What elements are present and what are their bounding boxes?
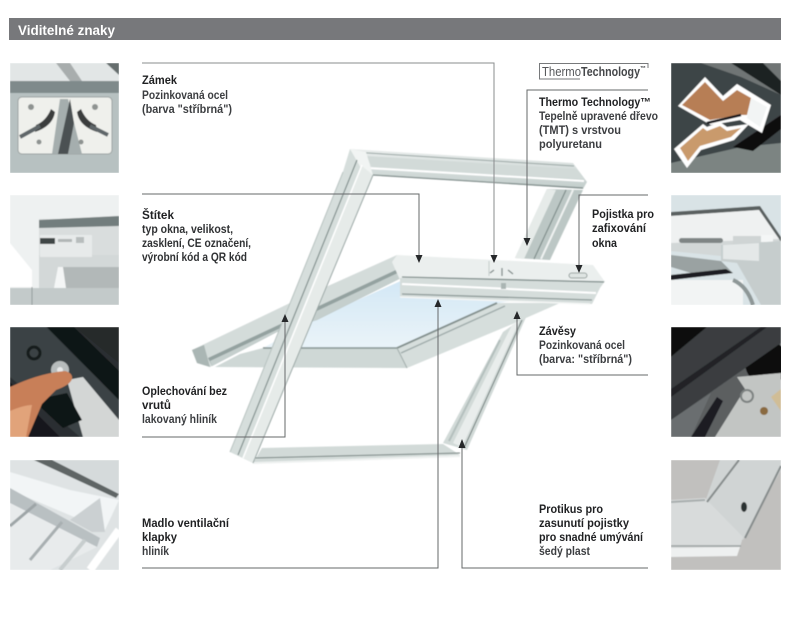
label: Protikus: pro snadné umývání <box>539 532 644 544</box>
label: Protikus <box>539 504 644 558</box>
leader: Madlo <box>142 299 442 568</box>
label: Madlo: hliník <box>142 546 170 558</box>
logo: ThermoTechnology: ™ <box>640 65 646 72</box>
label: Thermo Technology: polyuretanu <box>539 139 602 151</box>
label: Štítek <box>142 209 251 264</box>
label: Závěsy: Pozinkovaná ocel <box>539 340 625 352</box>
label: Protikus: šedý plast <box>539 546 590 558</box>
logo: ThermoTechnology: Technology <box>581 65 640 79</box>
label: Pojistka: Pojistka pro <box>592 209 654 221</box>
photo: locking pin <box>671 195 781 305</box>
frame left stile <box>230 149 373 463</box>
photo: hinge <box>671 327 781 437</box>
label: Madlo: Madlo ventilační <box>142 518 230 530</box>
label: Oplechování: vrutů <box>142 400 171 412</box>
label: Zámek: Pozinkovaná ocel <box>142 90 228 102</box>
photo: lock <box>10 63 119 173</box>
photo: vent handle <box>10 460 119 570</box>
heading: Viditelné znaky <box>18 23 115 38</box>
label: Štítek: zasklení, CE označení, <box>142 238 251 250</box>
label: Pojistka <box>592 209 654 250</box>
label: Protikus: zasunutí pojistky <box>539 518 630 530</box>
frame bottom rail <box>253 444 460 463</box>
lower right frame stile <box>443 315 527 450</box>
label: Závěsy: (barva: "stříbrná") <box>539 354 632 366</box>
window illustration <box>192 149 605 463</box>
label: Zámek: (barva "stříbrná") <box>142 104 232 116</box>
upper right stile behind sash <box>515 189 583 260</box>
sash right rail <box>397 303 560 368</box>
label: Thermo Technology: Thermo Technology™ <box>539 97 651 109</box>
leader: Oplechování <box>142 314 288 437</box>
label: Madlo <box>142 518 230 558</box>
leader: Thermo Technology <box>524 90 648 246</box>
label: Thermo Technology: (TMT) s vrstvou <box>539 125 621 137</box>
label: Oplechování <box>142 386 227 426</box>
photo: wood cross-section <box>671 63 781 173</box>
label: Pojistka: zafixování <box>592 223 647 235</box>
leader: Štítek <box>142 194 422 263</box>
logo: ThermoTechnology <box>540 64 648 79</box>
label: Zámek: Zámek <box>142 75 178 87</box>
label: Oplechování: lakovaný hliník <box>142 414 218 426</box>
label: Závěsy: Závěsy <box>539 326 577 338</box>
header bar <box>9 18 781 40</box>
sash top bar with handle <box>392 255 605 304</box>
photo: hand on hinge <box>10 327 119 437</box>
sash left rail <box>192 255 403 367</box>
label: Thermo Technology: Tepelně upravené dřevo <box>539 111 658 123</box>
outer frame top rail <box>343 149 587 189</box>
leader: Zámek <box>142 63 498 263</box>
leader: Protikus <box>458 439 648 568</box>
label: Protikus: Protikus pro <box>539 504 603 516</box>
label: Zámek <box>142 75 232 116</box>
label: Pojistka: okna <box>592 238 618 250</box>
label: Závěsy <box>539 326 632 366</box>
leader: Závěsy <box>514 311 648 375</box>
label: Štítek: typ okna, velikost, <box>142 224 233 236</box>
label: Štítek: Štítek <box>142 209 175 222</box>
label: Štítek: výrobní kód a QR kód <box>142 252 247 264</box>
label: Madlo: klapky <box>142 532 178 544</box>
logo: ThermoTechnology: Thermo <box>542 65 581 79</box>
glass pane <box>263 280 600 348</box>
sash bottom rail <box>215 348 407 368</box>
photo: strike plate <box>671 460 781 570</box>
label: Thermo Technology <box>539 97 658 151</box>
label: Oplechování: Oplechování bez <box>142 386 227 398</box>
leader: Pojistka <box>576 195 648 273</box>
photo: label plate <box>10 195 119 305</box>
